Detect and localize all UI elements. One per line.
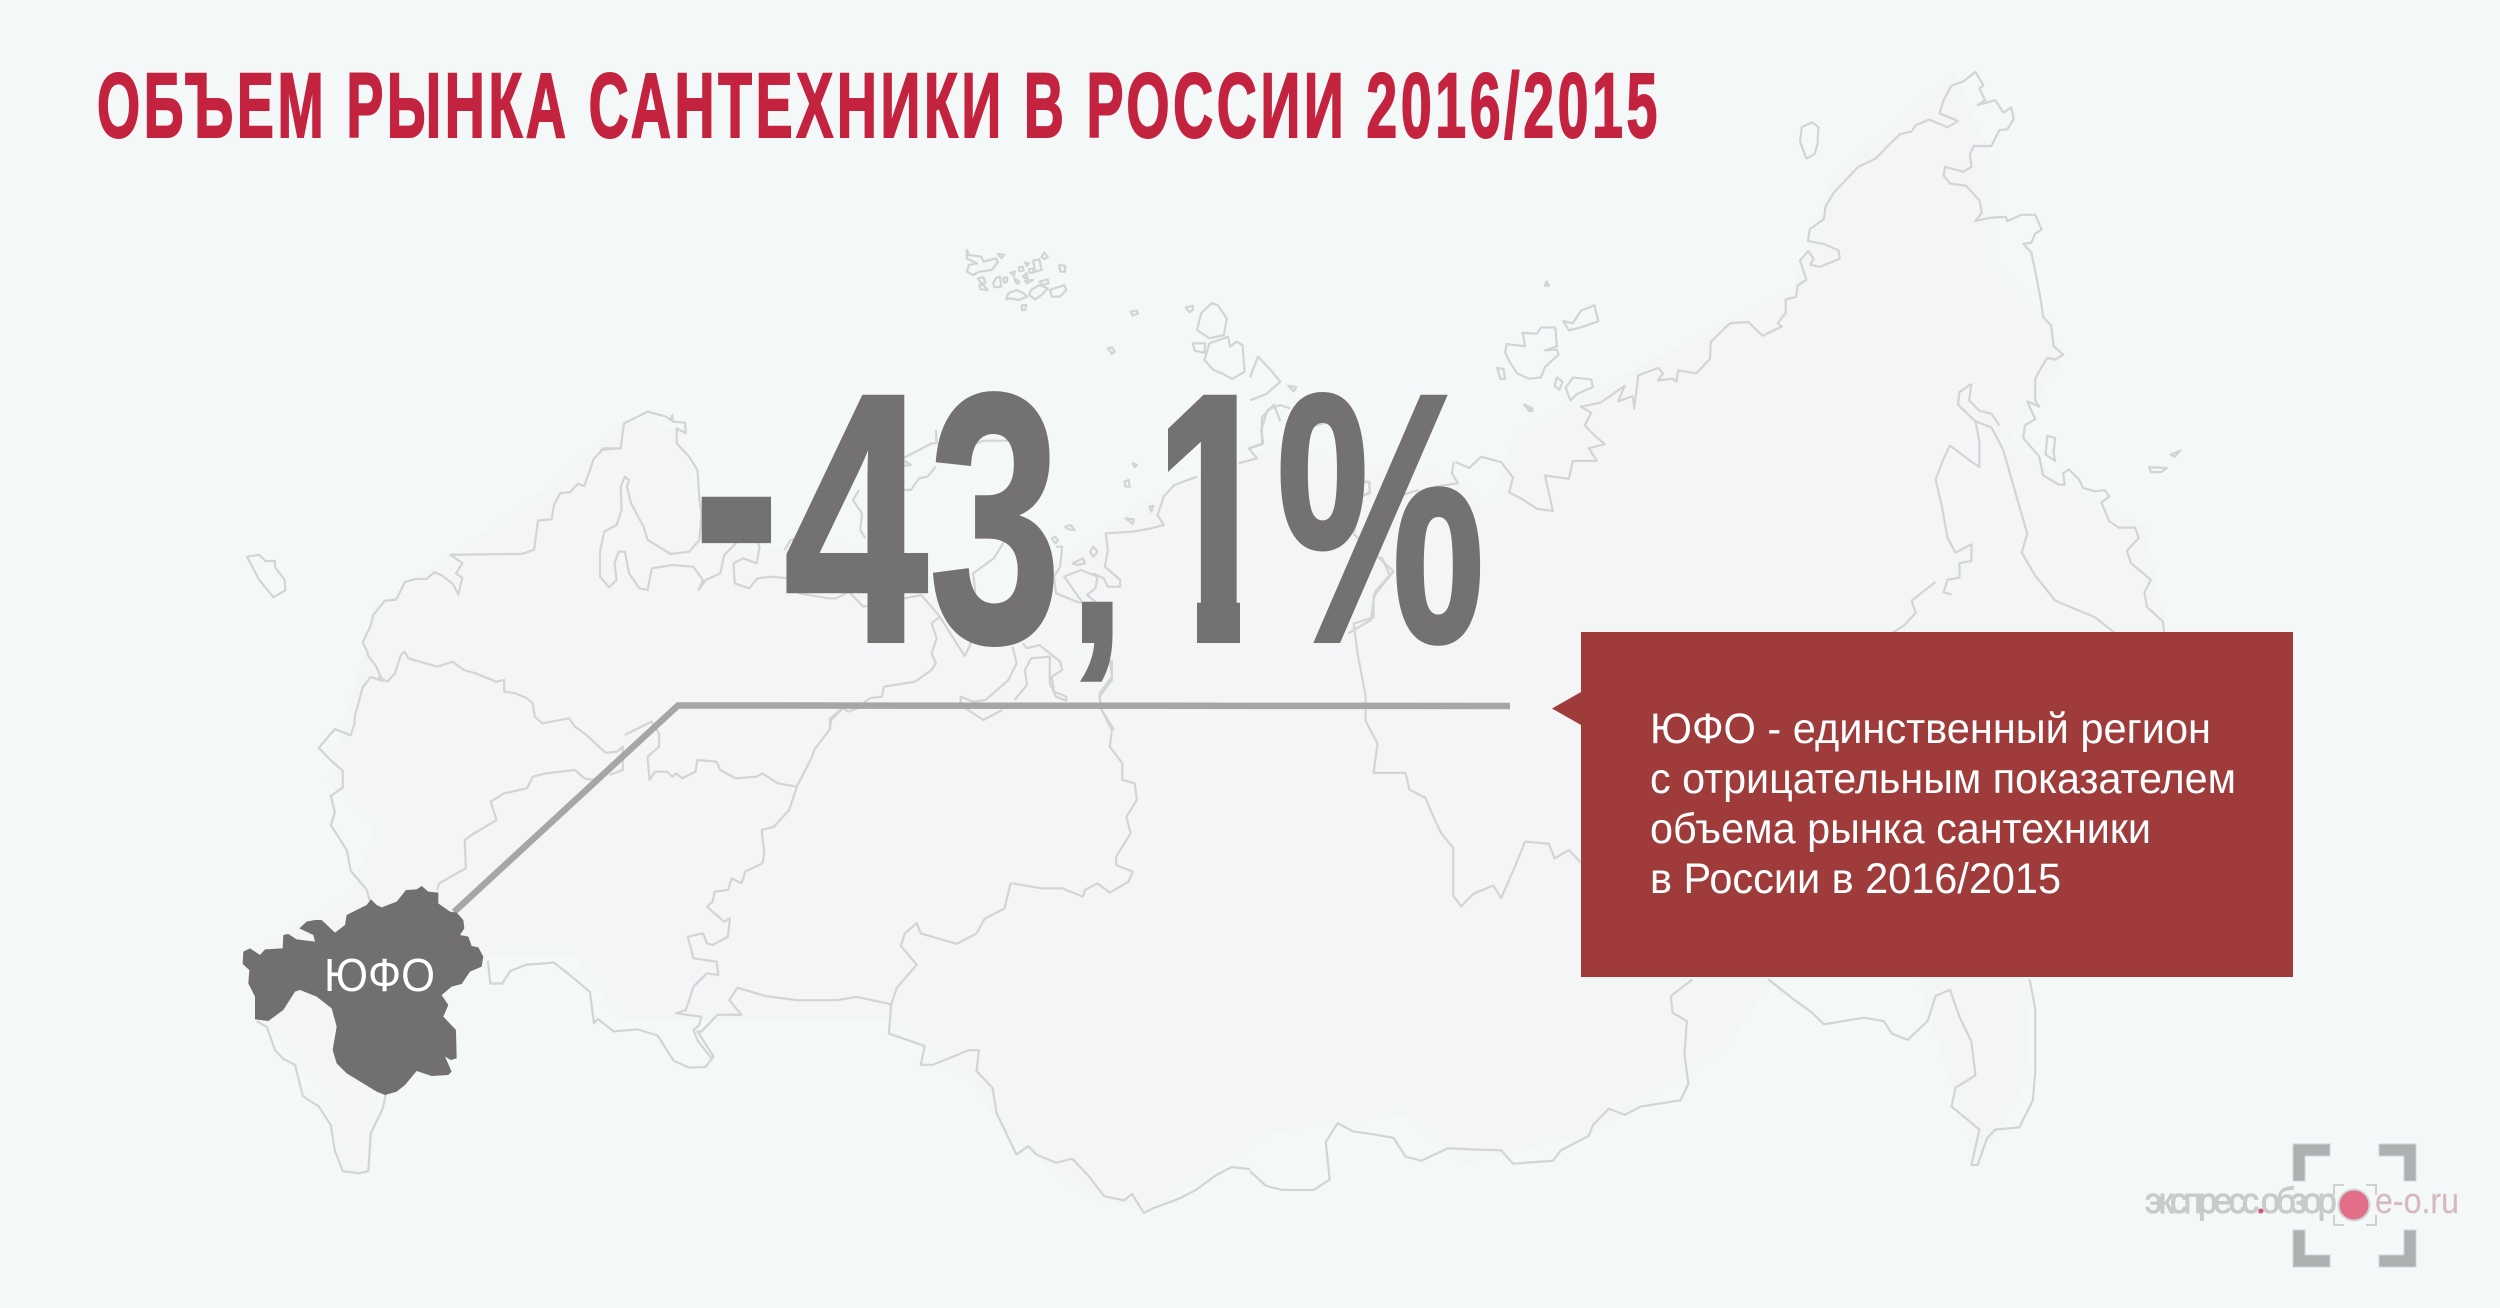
callout text: ЮФО - единственный регион (1650, 705, 2211, 753)
callout background with pointer (1552, 632, 2293, 977)
map outline: Arctic coast and islands (600, 250, 1245, 730)
logo: экспресс.обзор e-o.ru (2145, 1144, 2459, 1267)
map outline: Taymyr and Lena region (1012, 405, 1533, 897)
big number -43,1%: - (693, 292, 780, 688)
logo corner brackets (2293, 1144, 2416, 1267)
logo dot (2258, 1208, 2264, 1214)
callout box (1552, 632, 2293, 977)
map fill (247, 72, 2168, 1212)
map of Russia (247, 72, 2180, 1213)
logo small brackets (2334, 1185, 2376, 1225)
map outline: south-west borders (257, 654, 1250, 1213)
ЮФО label: ЮФО (324, 949, 435, 1001)
logo circle (2338, 1190, 2370, 1220)
big number -43,1%: , (1070, 415, 1124, 694)
callout text: с отрицательным показателем (1650, 755, 2236, 803)
logo domain: e-o.ru (2375, 1180, 2459, 1221)
logo wordmark: экспресс.обзор (2145, 1180, 2336, 1221)
ЮФО filled territory (243, 886, 483, 1095)
leader line from region to callout (454, 706, 1510, 912)
big number -43,1%: 4 (784, 321, 930, 717)
big number -43,1%: 1 (1146, 321, 1280, 717)
big number -43,1%: 3 (929, 321, 1061, 717)
callout text: объема рынка сантехники (1650, 805, 2151, 853)
big number -43,1%: % (1276, 321, 1485, 717)
callout text: в России в 2016/2015 (1650, 855, 2061, 903)
map outline: south-east coast and borders (1250, 654, 2035, 1190)
callout text (1650, 705, 2236, 903)
region shape: ЮФО (243, 886, 483, 1095)
map outline: federal district borders (378, 652, 843, 1060)
map outline: north-east coast and Chukotka (1250, 72, 2180, 654)
map outline: north-west and Kaliningrad (247, 448, 622, 654)
big number -43,1% (702, 391, 1480, 682)
